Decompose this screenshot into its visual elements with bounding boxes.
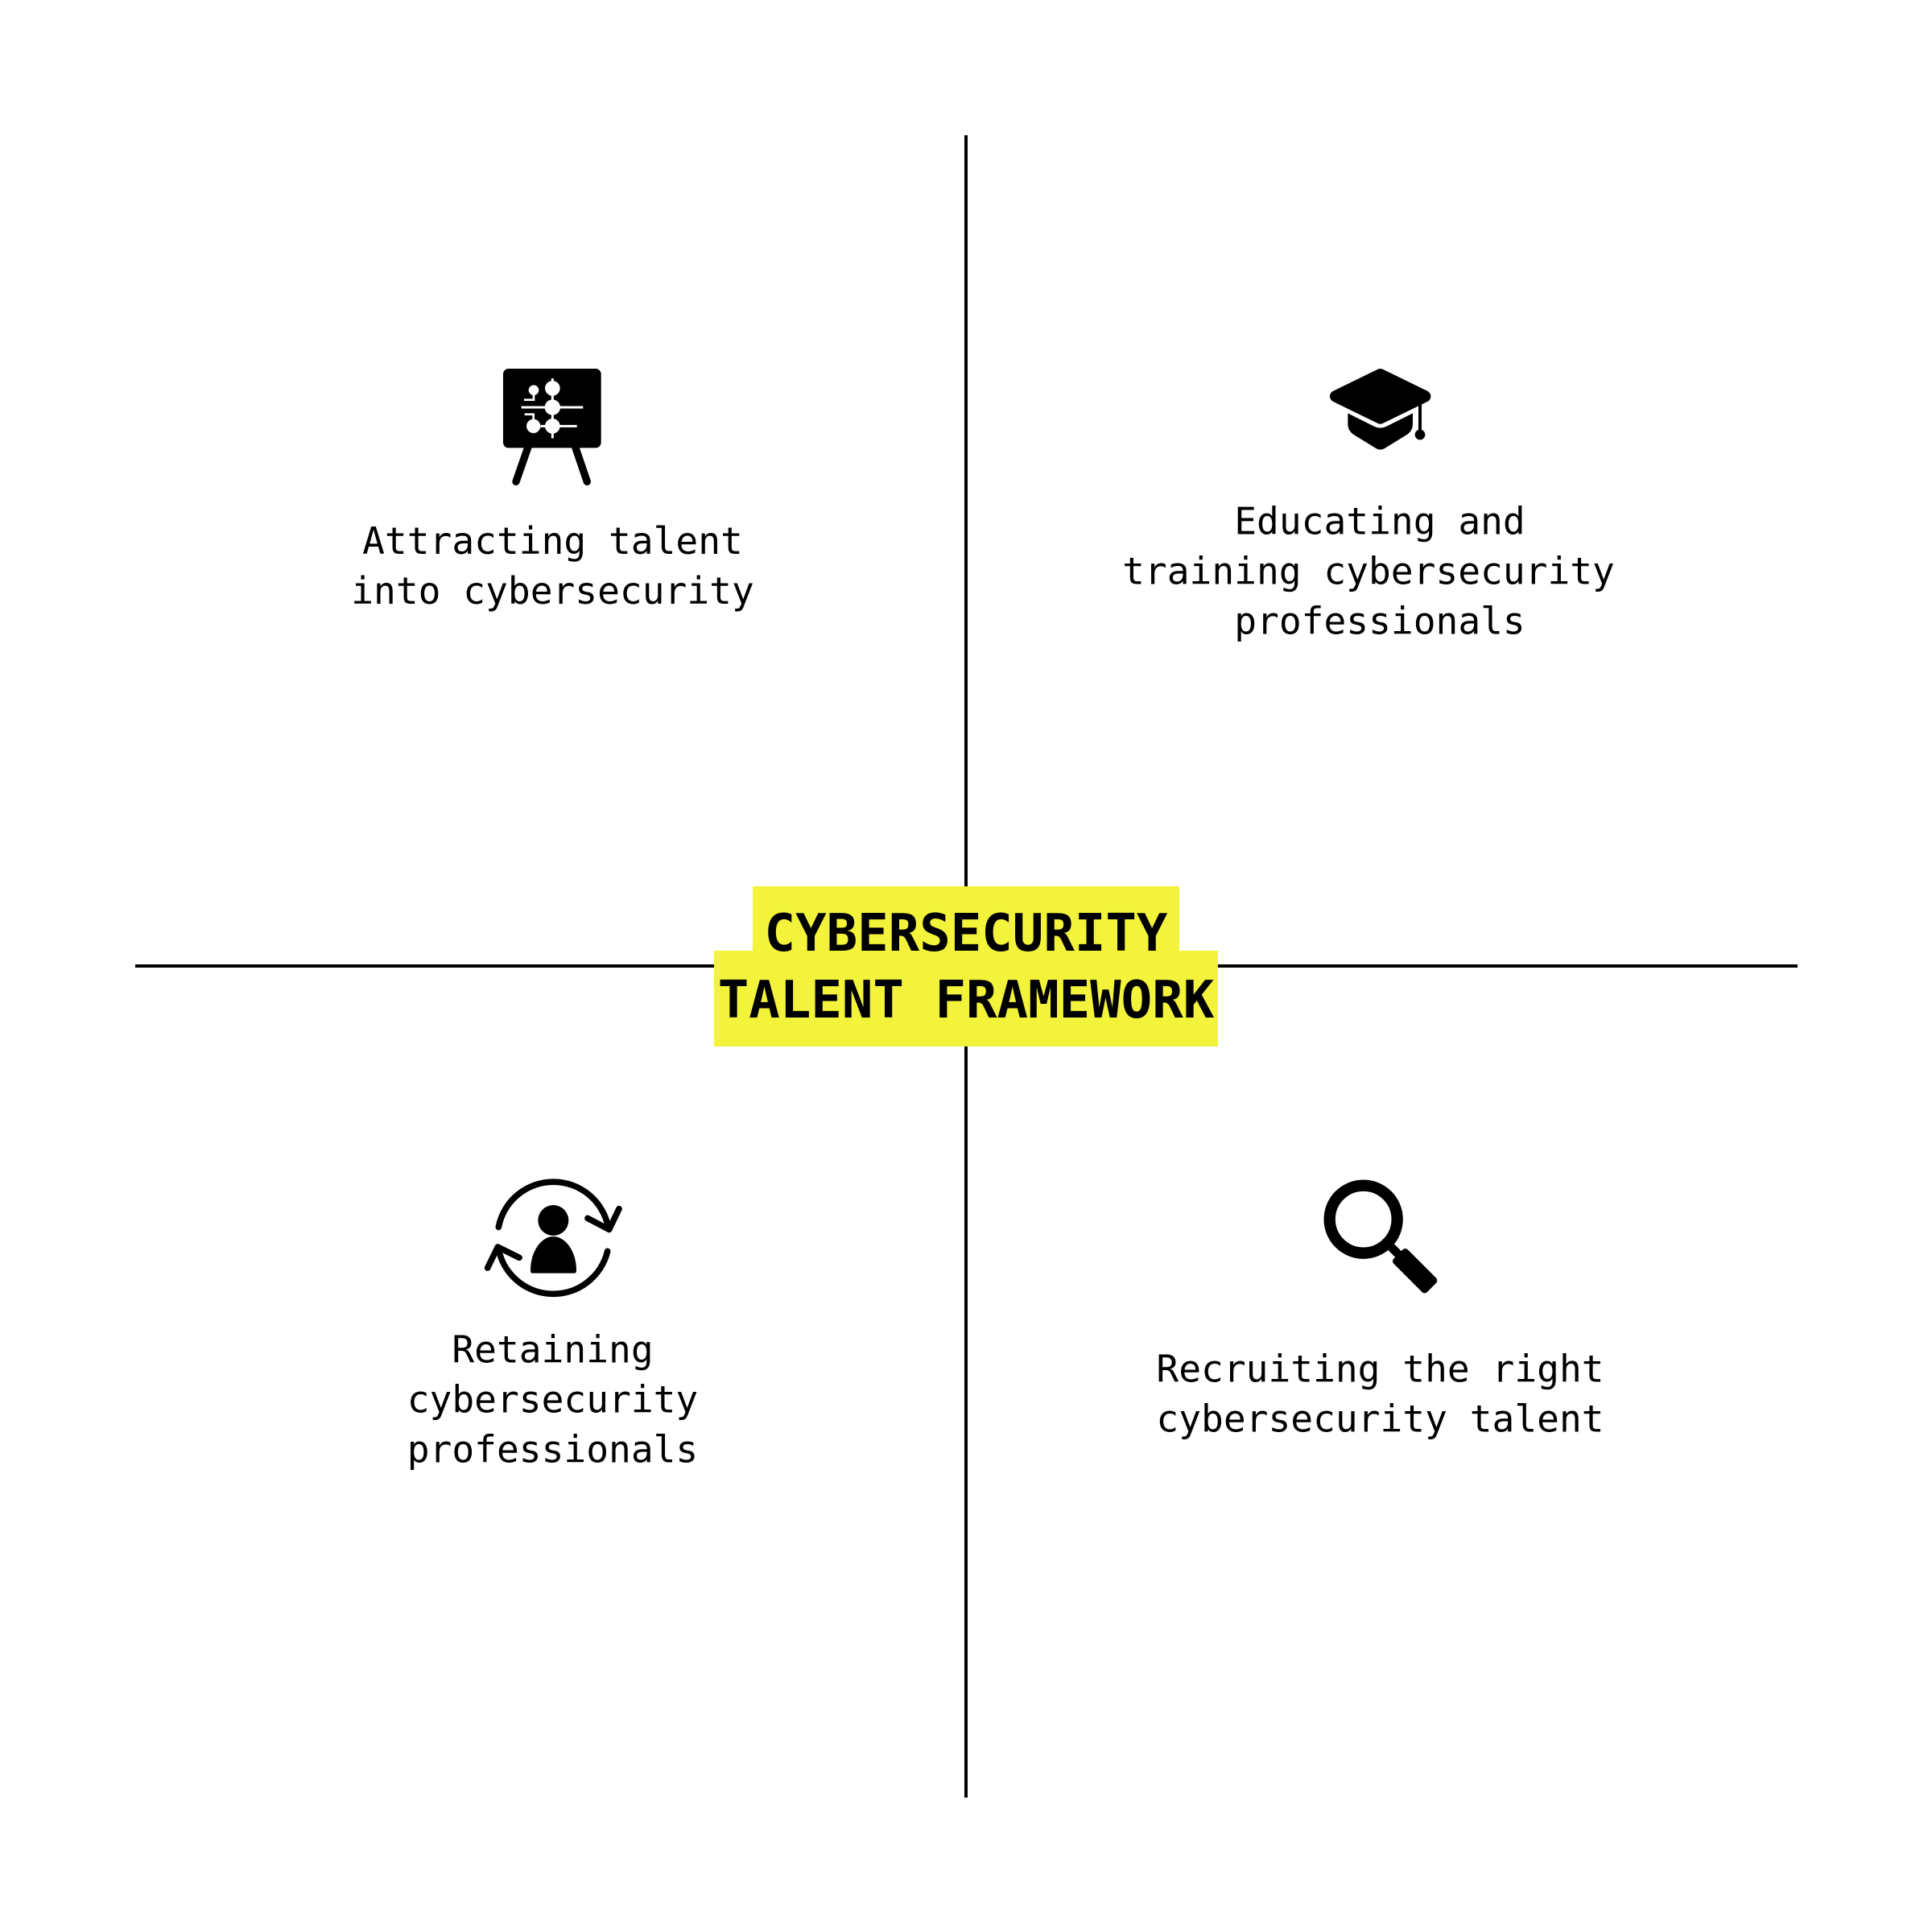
- panel: educating and training: [1122, 374, 1615, 642]
- title: cybersecurity talent framework: CYBERSECURITY: [765, 904, 1168, 964]
- text: retaining professionals: professionals: [407, 1428, 698, 1472]
- icon: presentation board: [503, 369, 601, 481]
- title: cybersecurity talent framework: [714, 886, 1218, 1046]
- text: recruiting talent: cybersecurity talent: [1156, 1397, 1604, 1441]
- panel: attracting talent: [351, 369, 754, 613]
- icon: magnifying glass: [1330, 1186, 1439, 1294]
- text: educating and training: training cybersecurity: [1122, 549, 1615, 592]
- title: cybersecurity talent framework: TALENT FRAMEWORK: [718, 971, 1215, 1030]
- icon: person with cycle arrows: [488, 1182, 619, 1294]
- text: attracting talent: Attracting talent: [362, 519, 743, 563]
- text: recruiting talent: Recruiting the right: [1156, 1348, 1604, 1391]
- text: educating and training: professionals: [1234, 599, 1525, 642]
- panel: retaining professionals: [407, 1182, 698, 1472]
- text: retaining professionals: cybersecurity: [407, 1378, 698, 1422]
- text: educating and training: Educating and: [1234, 499, 1525, 543]
- text: retaining professionals: Retaining: [452, 1328, 654, 1372]
- panel: recruiting talent: [1156, 1186, 1604, 1441]
- text: attracting talent: into cybersecurity: [351, 569, 754, 613]
- icon: graduation cap: [1335, 374, 1425, 449]
